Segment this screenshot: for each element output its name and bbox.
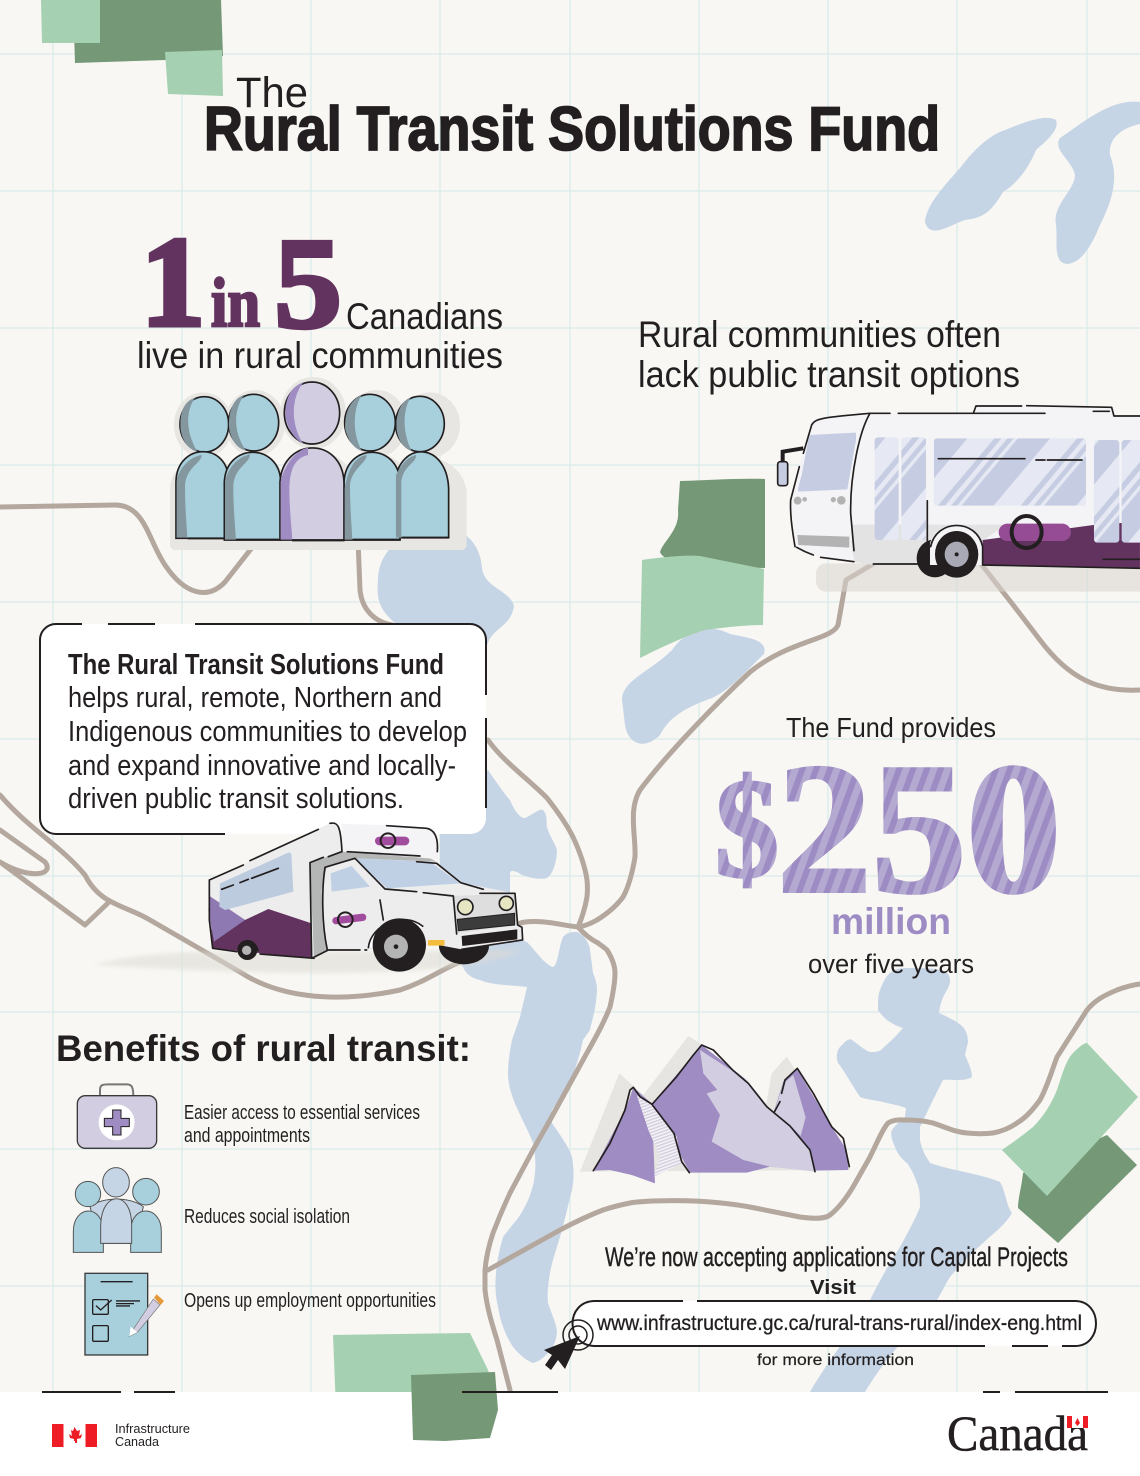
bus windows <box>875 437 899 540</box>
bus logo <box>999 524 1071 541</box>
callout: fund description: helps rural, remote, Northern and <box>68 682 442 714</box>
heading: rural communities lack transit <box>638 314 1020 395</box>
road: left spur <box>0 830 108 925</box>
title: Rural Transit Solutions Fund <box>204 95 940 164</box>
road: bus right <box>978 560 1140 690</box>
call to action: Visit <box>810 1277 856 1299</box>
benefit: employment: Opens up employment opportunities <box>184 1290 436 1312</box>
icon: first aid kit <box>77 1084 157 1148</box>
illustration: bus <box>778 406 1140 592</box>
lake: right <box>810 968 1012 1392</box>
statistic: $250 million: over five years <box>808 949 974 979</box>
statistic: 1 in 5 Canadians: Canadians <box>346 296 503 337</box>
map: water bodies <box>378 102 1140 1392</box>
call to action: for more information <box>757 1352 914 1369</box>
mountain outlines <box>593 1045 849 1173</box>
statistic: $250 million: million <box>831 901 951 942</box>
people shadow <box>175 382 462 545</box>
block: centre light <box>640 556 764 658</box>
road: junction south <box>485 927 615 1390</box>
footer: Canada <box>115 1435 159 1449</box>
bus lights <box>794 496 846 505</box>
road: under people <box>358 540 392 625</box>
van logos <box>375 837 409 845</box>
bus wheel arch and wheels <box>917 539 953 577</box>
illustration: van <box>93 823 523 973</box>
benefit: social isolation: Reduces social isolation <box>184 1206 350 1228</box>
statistic: 1 in 5 Canadians <box>137 211 503 376</box>
bus body <box>791 406 1140 568</box>
callout: fund description <box>40 624 486 834</box>
benefit: employment <box>85 1273 436 1355</box>
block: top left dark <box>73 0 223 63</box>
benefit: essential services <box>77 1084 420 1148</box>
flag <box>52 1424 97 1447</box>
lake: centre left <box>378 528 514 650</box>
canada wordmark: Canada <box>947 1405 1088 1461</box>
statistic: $250 million <box>715 712 1061 979</box>
callout: fund description: The Rural Transit Solutions Fund <box>68 649 444 681</box>
mountain shadow <box>580 1036 850 1172</box>
benefit: essential services: Easier access to essential services <box>184 1102 420 1124</box>
illustration: mountains <box>580 1036 850 1183</box>
road: callout to junction <box>488 740 587 927</box>
block: right dark <box>1018 1135 1137 1243</box>
road: left to van <box>0 795 578 997</box>
van outline <box>209 823 523 958</box>
heading: benefits: Benefits of rural transit: <box>56 1028 471 1069</box>
icon: group of people <box>73 1168 161 1252</box>
block: top left small <box>165 50 223 96</box>
title: The <box>236 69 308 117</box>
block: right light <box>1002 1043 1138 1196</box>
road: upper left <box>0 505 258 592</box>
statistic: 1 in 5 Canadians: live in rural communities <box>137 335 503 376</box>
block: top left light <box>41 0 100 43</box>
benefit: essential services: and appointments <box>184 1125 310 1147</box>
lake: top right <box>925 118 1057 231</box>
callout: fund description: driven public transit solutions. <box>68 783 404 815</box>
footer <box>0 1372 1140 1476</box>
statistic: $250 million: $ <box>715 749 779 907</box>
van lights and grille <box>458 899 473 915</box>
icon: cursor <box>544 1320 593 1370</box>
title <box>204 69 940 164</box>
statistic: $250 million: The Fund provides <box>786 712 996 743</box>
call to action <box>572 1242 1098 1369</box>
heading: rural communities lack transit: lack public transit options <box>638 354 1020 395</box>
url pill <box>575 1301 1098 1346</box>
call to action: www.infrastructure.gc.ca/rural-trans-rural/index-eng.html <box>596 1312 1082 1335</box>
footer green block <box>411 1372 498 1441</box>
road: from bus <box>578 564 873 927</box>
benefit: social isolation <box>73 1168 350 1252</box>
bus lines <box>791 406 1140 568</box>
map: roads <box>0 505 1140 1390</box>
callout: fund description: Indigenous communities to develop <box>68 716 467 748</box>
heading: rural communities lack transit: Rural communities often <box>638 314 1001 355</box>
department name: Infrastructure <box>115 1422 190 1436</box>
statistic: 1 in 5 Canadians: 1 <box>141 211 205 353</box>
bus mirror <box>783 448 803 464</box>
lake: under green block <box>622 629 765 744</box>
lake: top right edge <box>1056 102 1140 264</box>
callout: fund description: and expand innovative and locally- <box>68 750 456 782</box>
bus shadow <box>816 563 1140 592</box>
mountain fills <box>593 1045 848 1183</box>
icon: five people <box>175 382 462 545</box>
statistic: 1 in 5 Canadians: in <box>211 265 260 342</box>
van body <box>439 928 489 964</box>
block: centre dark <box>660 479 765 568</box>
block: bottom light <box>333 1333 495 1409</box>
van shadow <box>93 950 523 973</box>
river: centre <box>440 770 597 1363</box>
icon: checklist <box>85 1273 164 1355</box>
road: south east <box>488 984 1140 1270</box>
statistic: $250 million: 250 <box>777 726 1061 932</box>
van wheels <box>368 920 423 948</box>
statistic: 1 in 5 Canadians: 5 <box>274 212 342 356</box>
